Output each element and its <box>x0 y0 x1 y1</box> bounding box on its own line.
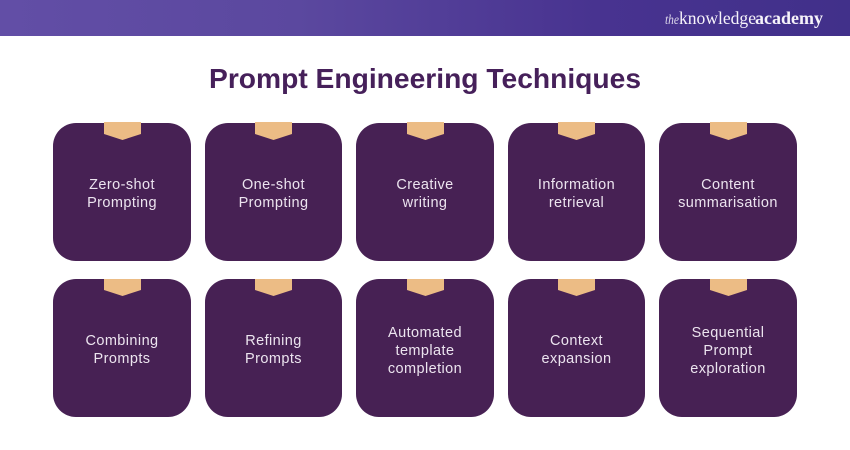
card: Combining Prompts <box>53 279 191 417</box>
card: Combining Prompts: Combining <box>85 333 159 349</box>
card: One-shot Prompting: One-shot <box>242 177 305 193</box>
card: Content summarisation: Content <box>701 177 755 193</box>
logo: the knowledge academy: knowledge <box>679 8 756 28</box>
card: Context expansion: Context <box>550 333 603 349</box>
card: Refining Prompts <box>205 279 342 417</box>
card: One-shot Prompting <box>205 122 342 261</box>
card: Sequential Prompt exploration: Prompt <box>703 343 753 359</box>
card: Information retrieval <box>508 122 645 261</box>
card: Automated template completion: Automated <box>388 325 462 341</box>
card: Sequential Prompt exploration: exploration <box>690 361 766 377</box>
card: Creative writing: Creative <box>396 177 454 193</box>
logo: the knowledge academy <box>665 8 823 28</box>
title: Prompt Engineering Techniques <box>209 63 641 94</box>
card: Information retrieval: retrieval <box>549 195 604 211</box>
card: Refining Prompts: Refining <box>245 333 302 349</box>
card: Sequential Prompt exploration <box>659 279 797 417</box>
header banner <box>0 0 850 36</box>
card: Refining Prompts: Prompts <box>245 351 302 367</box>
card: Zero-shot Prompting <box>53 122 191 261</box>
card: Information retrieval: Information <box>538 177 615 193</box>
card: Sequential Prompt exploration: Sequential <box>692 325 764 341</box>
logo: the knowledge academy: academy <box>755 8 823 28</box>
card: Automated template completion: template <box>396 343 454 359</box>
card: Context expansion <box>508 279 645 417</box>
card: Zero-shot Prompting: Prompting <box>87 195 157 211</box>
logo: the knowledge academy: the <box>665 13 679 28</box>
card: Creative writing: writing <box>402 195 447 211</box>
card: Creative writing <box>356 122 494 261</box>
card: Combining Prompts: Prompts <box>94 351 150 367</box>
card: Content summarisation: summarisation <box>678 195 778 211</box>
card: Zero-shot Prompting: Zero-shot <box>89 177 155 193</box>
card: Content summarisation <box>659 122 797 261</box>
card: Automated template completion: completion <box>388 361 462 377</box>
card: One-shot Prompting: Prompting <box>239 195 308 211</box>
card: Automated template completion <box>356 279 494 417</box>
card: Context expansion: expansion <box>542 351 611 367</box>
